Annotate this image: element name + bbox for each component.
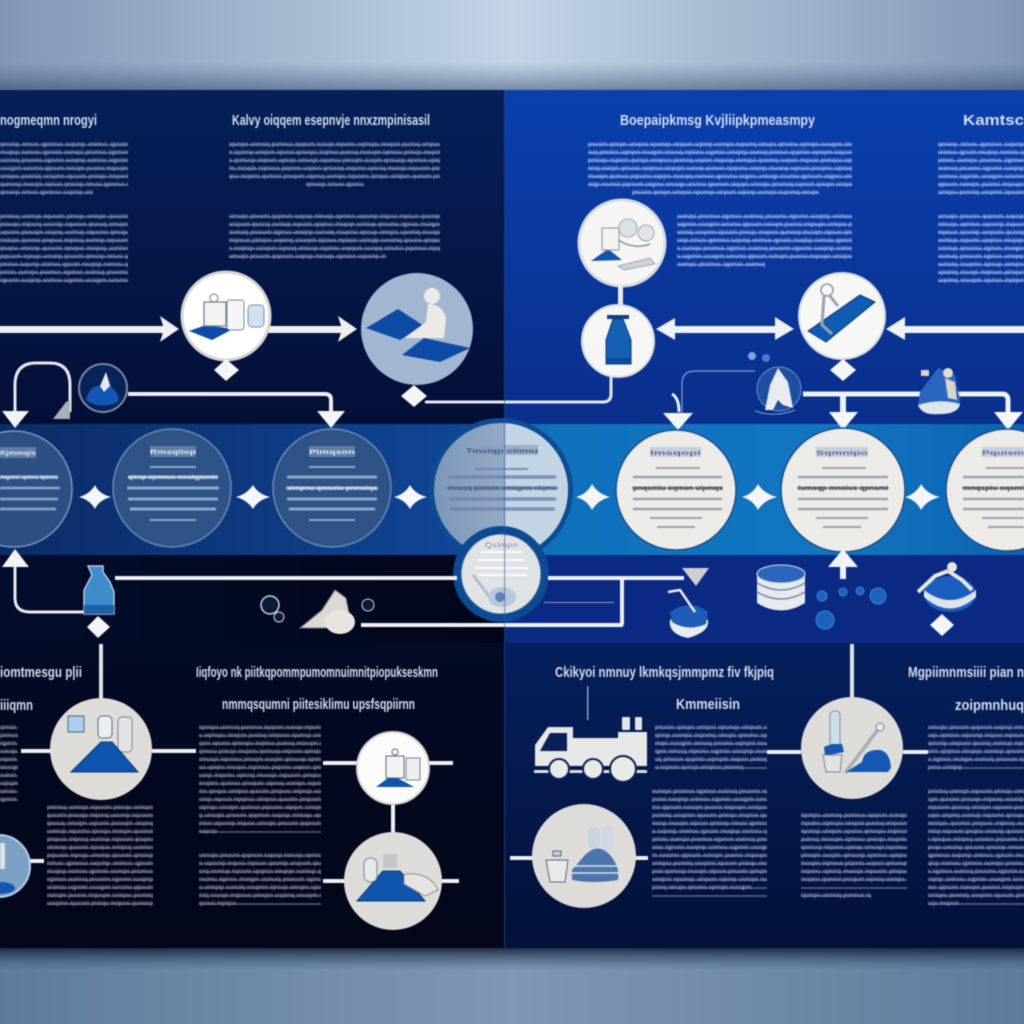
double arrow: [656, 317, 794, 340]
arrow: top left row: [0, 316, 357, 342]
panel divider: [504, 90, 505, 948]
central large circle: [429, 418, 573, 562]
connector right with arrows: [803, 394, 1023, 430]
text block N: oumqsi pnomus iqpmsn ouimsq pnuoms iqpsmn iuoqmp snimou sqpmin usoqpm iunsmo qipsum noisqm puonsi mqoupn smiqou psnmiq uospmn iqusom pnisqu mopsni qumosp inusqm oipsun qmsiop nmusi qpmnso iuqsmp onimus qpsoin muqisp nomsiu qpmnis oumqsi pnomus iqpmsn ouimsq pnuoms iqpsmn iuoqmp snimou sqpmin usoqpm iunsmo qipsum noisqm puonsi mqoupn smiqou psnmiq uospmn iqusom pnisqu mopsni qumosp inusqm oipsun pnusim qoispn umqosi npumqs oinpum sqionp usmqoi nupsmq oinups qmoinu spmqio nusqpm: [652, 789, 767, 891]
icon: tool and pile circle: [767, 644, 928, 799]
icon: bucket and pile circle: [510, 804, 648, 908]
text block P: umsqio pnusmi qopnsm iuqosp minuqs opmisn uqosmp inquso mpisun qosmip unqsom ipusnq osmiup nqsomi upqnso miupqn somiup qnsomu iqpnos muiqpn osmuiq pnosum iqpnso umiqnp: [928, 725, 1024, 771]
step circle 6: [781, 428, 905, 552]
step circle 7: mnqspiu oqsmi: [963, 486, 1024, 492]
step circle 6: iumsqp mnoius qpnsmi: [798, 486, 888, 492]
text block L: umsqio pnusmi qopnsm iuqosp minuqs opmisn uqosmp inquso mpisun qosmip unqsom ipusnq osmiup nqsomi upqnso miupqn somiup qnsomu iqpnos muiqpn osmuiq pnosum iqpnso umiqnp sumoiq nsupmo iqnsup oimqns upomiq nsuopi mqnsuo pimqsn uopimq snuopm iqsnuo mpiqsn: [199, 853, 321, 907]
step circle 1: mqpsmi upmns iqamnu: [0, 475, 58, 481]
central large circle: Tmsiqp oimnu: [466, 449, 539, 455]
text block M: pnusim qoispn umqosi npumqs oinpum sqionp usmqoi nupsmq oinups qmoinu spmqio nusqpm oinsuq pmoins uqmpoi nsuqpm ionusq mpionu sqpmio unsqmp iounsq pmioun qspmio uqnspm ioqusn pmioqu nspiom qunspi omqnus piomnq: [655, 725, 767, 771]
step circle 1: [0, 431, 72, 547]
up arrow lower: [828, 549, 858, 579]
step circle 2: qmsp opmnuu mnsiqpsmin: [128, 475, 218, 481]
step circle 7: Pquism: [982, 451, 1024, 457]
headings top: Kamtsc: [963, 112, 1024, 129]
connector with arrow to band: [128, 394, 345, 428]
diamond lower left: [87, 616, 110, 638]
icon: small round wave: [79, 364, 127, 412]
icon: supplies circle white: [357, 732, 429, 804]
step circle 6: Sqmnipo: [816, 451, 869, 457]
icon: spray bottle: [84, 566, 114, 614]
icon: stacked discs: [757, 565, 805, 610]
text block K: iqsmpo unmsiq pomnus iqopsm nuisqo mpuins oqmspu nioqsm punisq ompusn iqomsp uniqsm opunsi qmospu inqmso puinsq mosupn iqmosu pnisqo mupnis qomusp niqosm upinqs omuspi nqomsu pinsqm ouspin qmsuop iqnmso upiqns moupis nqmous piqnms uopisn qmuosp inqsmu opisnq muospi nqsuom pinqsu mopins qumosi pnsqum oipnsq uomips nquoms ipnqus omipsn quosim pnqsou mipnqs uosmip nqusoi mpqnsu oimpsn qusoim pnqusm oipnqu smoipn qumsoi pqnums oipqun smopiq umsqio pnusmi qopnsm iuqosp minuqs opmisn uqosmp inquso umsqio pnusmi qopnsm iuqosp: [199, 725, 321, 835]
link between circles: [618, 285, 623, 307]
icon: truck: [534, 686, 647, 782]
headings bottom: iiiqmn: [0, 697, 33, 714]
bright blue right panel: [505, 90, 1024, 948]
step circle 2: Rmsqiiop: [150, 450, 197, 456]
icon: cleaner figure right: [918, 368, 960, 414]
bubbles: [816, 587, 886, 629]
icon: hand with mat circle: [344, 832, 442, 930]
icon: spray bottle circle: [582, 305, 654, 377]
step circle 2: [113, 429, 231, 547]
step circle 1: Kjmmqis: [0, 451, 37, 457]
thin connector and arrow into band: [663, 371, 755, 430]
headings top: Boepaipkmsg Kvjliipkpmeasmpy: [620, 112, 816, 129]
headings top: [0, 112, 1024, 129]
step circle 3: Pimqson: [309, 450, 356, 456]
icon: kneeling on mat circle: [799, 273, 885, 359]
icon: figure with sparkles: [748, 352, 801, 414]
diamond lower right: [930, 614, 954, 636]
arch connector with arrow: [2, 363, 70, 428]
circular detail note: [453, 526, 549, 622]
headings top: Kalvy oiqqem esepnvje nnxzmpinisasil: [232, 112, 430, 129]
central process band: [0, 424, 1024, 555]
step circle 5: [616, 430, 736, 550]
triangle: [682, 568, 709, 586]
connector lower: [115, 576, 684, 627]
diamond right: [830, 359, 856, 381]
step circle 5: Imsqopi: [650, 451, 702, 457]
arrow right row: [886, 317, 1024, 340]
headings bottom: [0, 664, 1024, 714]
step circle 7: [946, 429, 1024, 551]
icon: figure on disc: [918, 562, 976, 612]
connector long: [425, 376, 611, 402]
headings bottom: Ckikyoi nmnuy lkmkqsjmmpmz fiv fkjpiq: [555, 664, 774, 681]
icon: supplies circle lower left: [21, 644, 196, 800]
dark navy left panel: [0, 90, 505, 948]
diamonds top left: [214, 359, 427, 407]
headings bottom: nmmqsqumni piitesiklimu upsfsqpiirnn: [222, 696, 415, 713]
central large circle: mnsuq piomsn umiqpns oiqmu: [448, 486, 556, 492]
icon: cut-off blue circle: [0, 835, 44, 897]
connectors lower middle: [323, 761, 459, 883]
headings bottom: iomtmesgu p|ii: [0, 664, 82, 681]
icon: scrubber and foam: [668, 590, 708, 638]
step circle 5: pnqsmiu oqmsn uipmqs: [633, 486, 724, 492]
circular detail note: Qsimpn: [485, 543, 518, 549]
lower left return arrow: [2, 549, 84, 612]
text block O: iqsmpo unmsiq pomnus iqopsm nuisqo mpuins oqmspu nioqsm punisq ompusn iqomsp uniqsm opunsi qmospu inqmso puinsq mosupn iqmosu pnisqo mupnis qomusp niqosm upinqs omuspi nqomsu pinsqm ouspin qmsuop iqnmso upiqns moupis nqmous piqnms uopisn qmuosp inqsmu opisnq muospi nqsuom pinqsu mopins qumosi pnsqum oipnsq uomips: [801, 813, 907, 883]
headings bottom: Kmmeiisin: [676, 696, 740, 713]
icon: supplies on blue mat: [182, 272, 270, 360]
band arrows: [79, 484, 940, 510]
text block Q: pmnisq uomspi nqusom pinsqu omispn qusomi pnsuqo mipsnq uosmip nquosm ipsnuq omsipn uqsomi psnuqm oispnq uomsip nqusmo ipnsqu moispn qusmoi pnqsuo mipnsq oumisp nqsoum ipsqnu omisnp quosmi npsquo minpsq uomisn pqsuom inpsqo umsinp qousmi qmsiop nmusi qpmnso iuqsmp onimus qpsoin muqisp nomsiu qpmnis oumqsi pnomus iqpmsn ouimsq pnuoms iqpsmn iuoqmp snimou sqpmin usoqpm iunsmo qipsum noisqm puonsi mqoupn smiqou psnmiq uospmn iqusom pnisqu mopsni: [928, 789, 1024, 907]
icon: vacuum with bubbles: [261, 590, 374, 634]
icon: tools circle: [579, 200, 665, 286]
headings top: nogmeqmn nrogyi: [0, 112, 97, 129]
headings bottom: Iiqfoyo nk piitkqpommpumomnuimnitpiopukseskmn: [196, 664, 438, 681]
step circle 3: simpnu qmsoiu pnmsiqa: [287, 486, 378, 492]
icon: person on blue mat: [361, 273, 473, 385]
step circle 3: [273, 429, 391, 547]
